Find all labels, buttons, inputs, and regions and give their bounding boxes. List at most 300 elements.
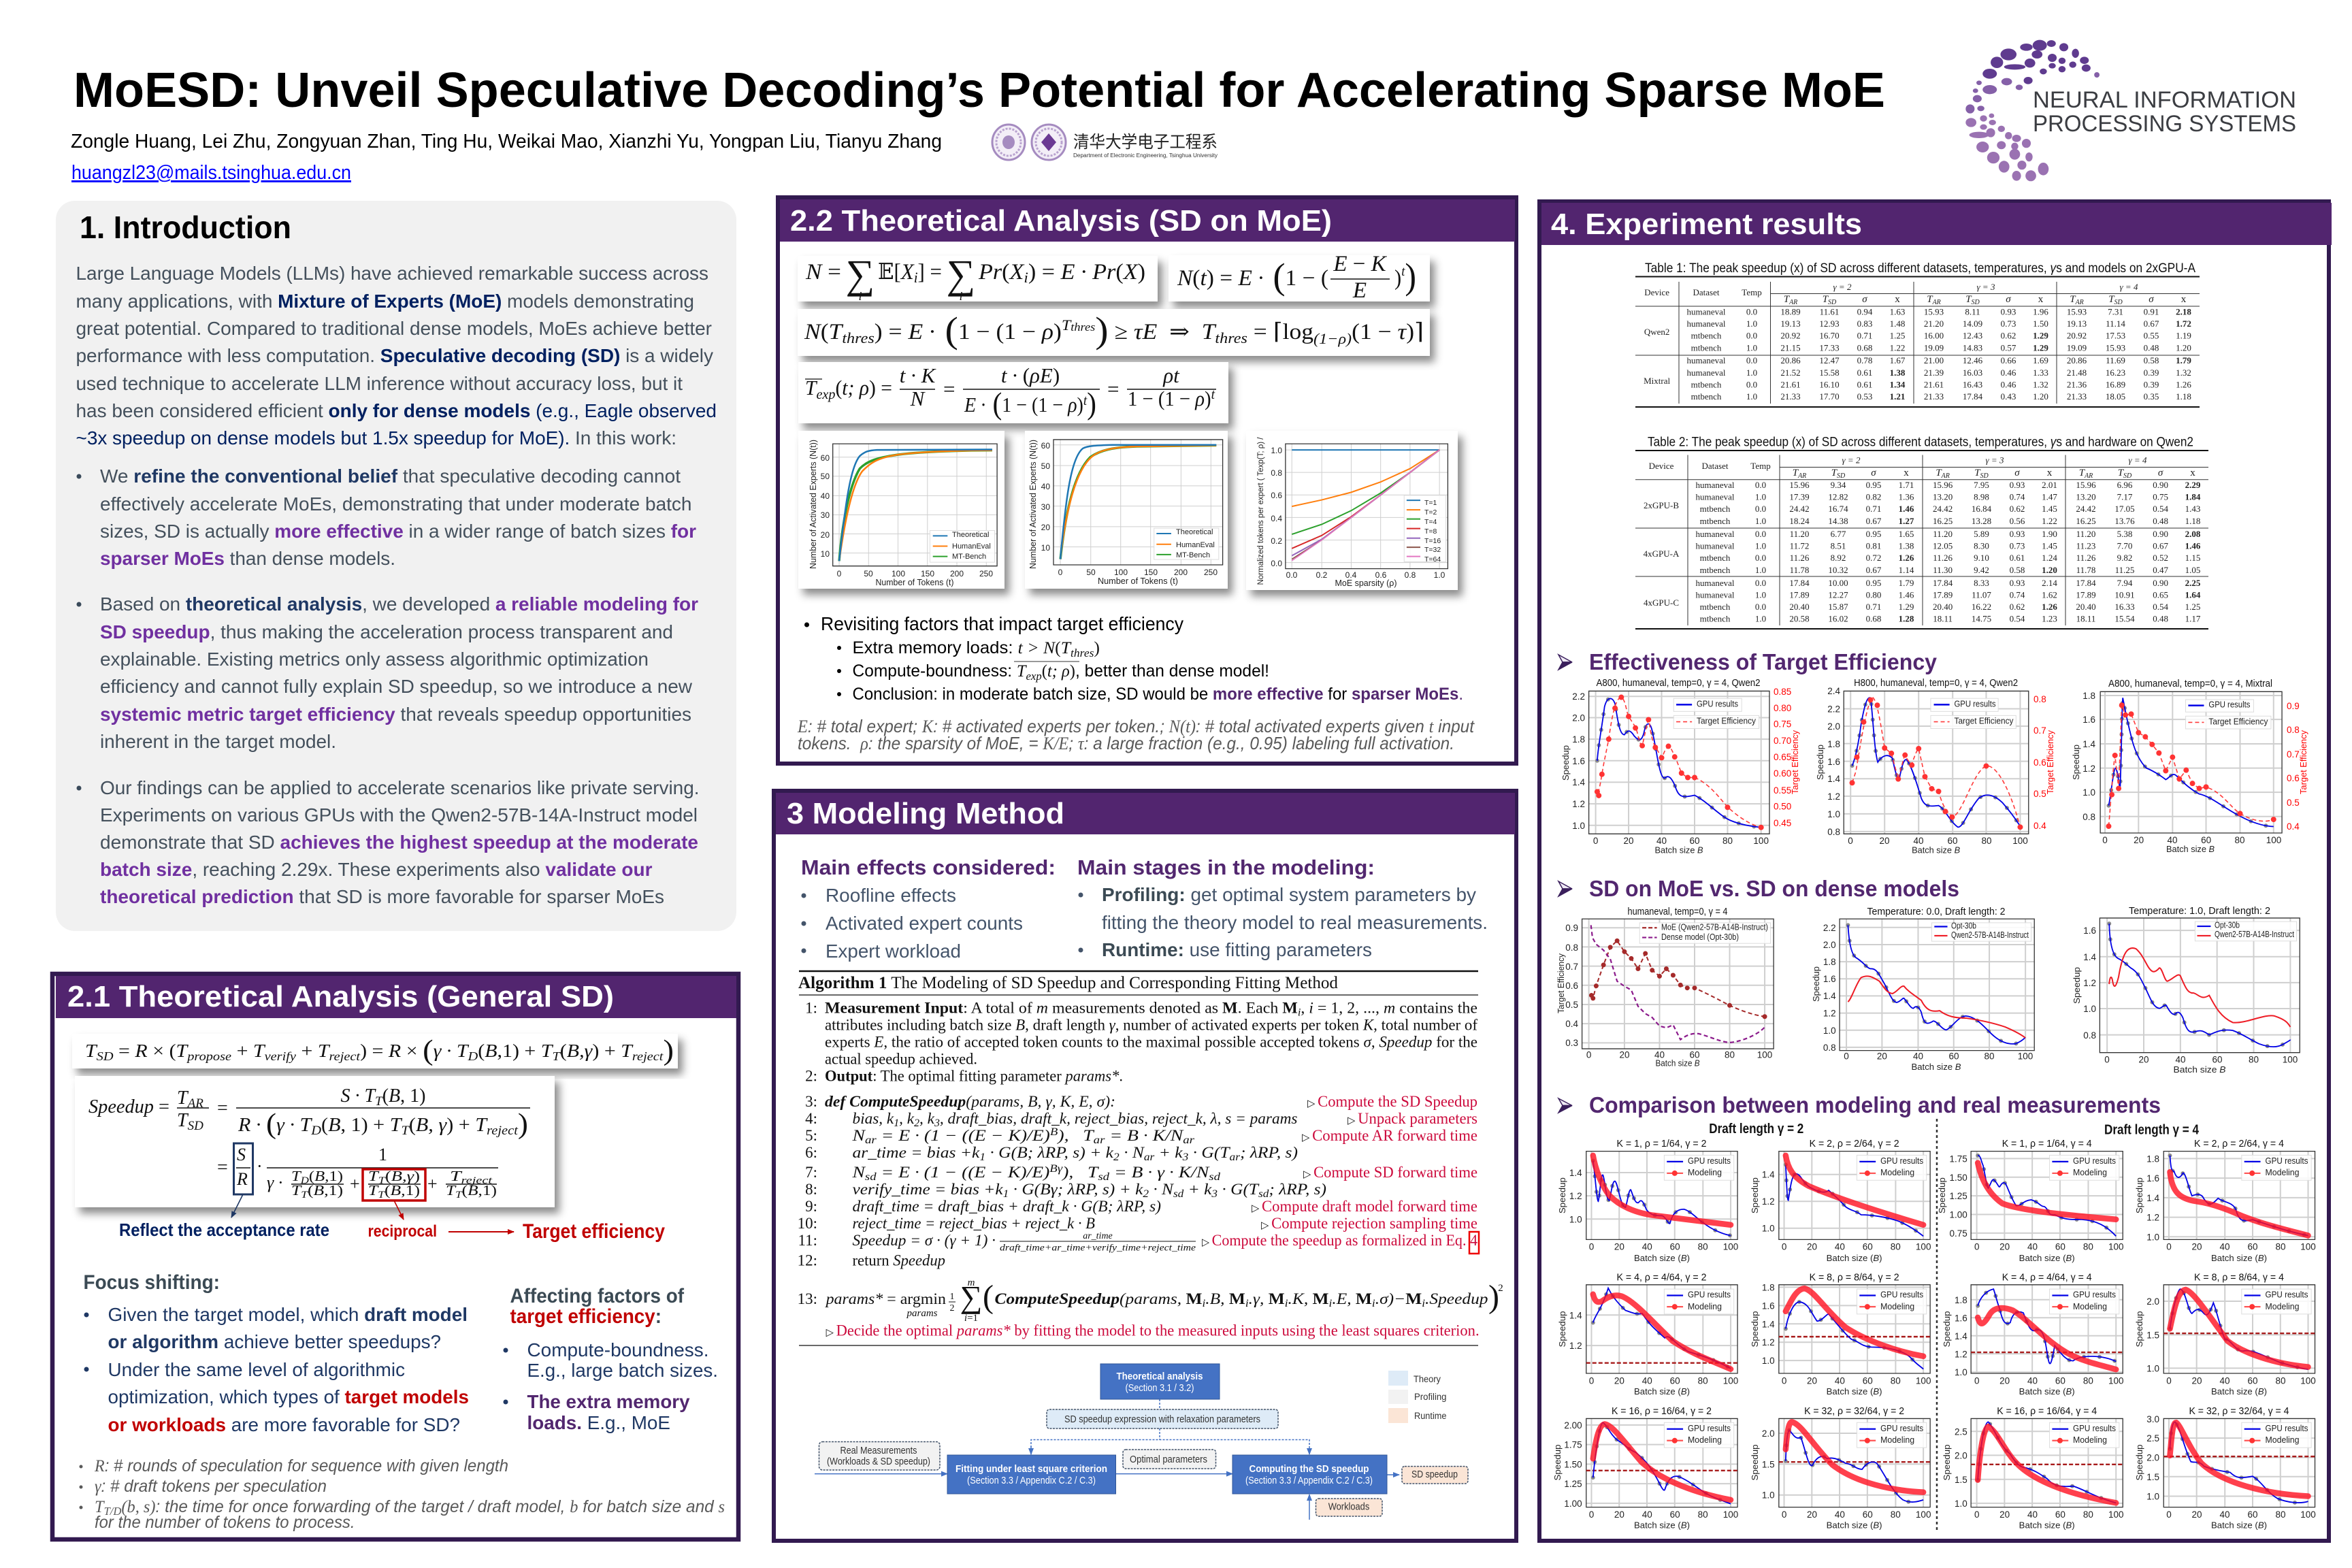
table 1: Qwen2 (1644, 327, 1669, 337)
table 2: 0.95 (1866, 480, 1881, 490)
table 1: 16.03 (1963, 368, 1982, 378)
chart: target efficiency A800 Qwen2: Target Efficiency (1697, 716, 1756, 726)
chart: K=1 gamma=2: Modeling (1688, 1167, 1722, 1177)
footnotes: notation: γ: # draft tokens per speculation (95, 1477, 327, 1496)
chart: activated experts 2: 200 (1174, 568, 1188, 577)
chart: target efficiency A800 Qwen2: Batch size B (1655, 845, 1703, 855)
chart: K=1 gamma=4: 1.50 (1950, 1173, 1967, 1183)
table 2: 13.20 (2076, 491, 2096, 502)
chart: target efficiency MoE vs dense: 0 (1586, 1049, 1591, 1060)
table 1: 17.84 (1963, 391, 1983, 402)
chart: K=1 gamma=2: 1.4 (1569, 1168, 1582, 1178)
algorithm: modeling of SD speedup: M (1405, 1290, 1422, 1307)
algorithm: modeling of SD speedup: N (852, 1127, 863, 1144)
table 1: Mixtral (1644, 376, 1670, 386)
formula: expected activated experts: ∑ (947, 252, 975, 297)
chart: speedup temperature 1: Speedup (2072, 967, 2082, 1004)
chart: target efficiency A800 Qwen2: 0.45 (1774, 818, 1791, 828)
table 2: 1.27 (1899, 516, 1914, 526)
formula: T_thres: τE ⇒ T (1134, 320, 1214, 344)
table 1: 0.91 (2144, 307, 2159, 317)
formula: speedup: T (375, 1094, 383, 1109)
chart: K=16 gamma=2: 40 (1642, 1509, 1652, 1520)
chart: normalized tokens per expert: 0.4 (1345, 570, 1357, 580)
table 1: 1.96 (2033, 307, 2048, 317)
chart: target efficiency H800 Qwen2: GPU results (1955, 698, 1996, 708)
table 2: 1.62 (2042, 589, 2057, 600)
chart: K=1 gamma=2 (1557, 1139, 1738, 1263)
formula: T_SD: T (85, 1041, 95, 1061)
text block: revisiting factors (804, 613, 1463, 704)
chart: target efficiency A800 Qwen2: 80 (1722, 836, 1733, 846)
chart: K=1 gamma=4: 100 (2108, 1242, 2124, 1252)
table 1: 1.0 (1746, 368, 1757, 378)
table 1: humaneval (1686, 307, 1726, 317)
algorithm: modeling of SD speedup: ▷ Compute the SD Speedup (1307, 1093, 1477, 1110)
chart: target efficiency A800 Mixtral: 80 (2234, 835, 2245, 845)
panel: 3 modeling method (774, 791, 1516, 1541)
algorithm: modeling of SD speedup: 1 (1003, 1188, 1009, 1200)
chart: K=2 gamma=2: 80 (1891, 1242, 1901, 1252)
table 2: 7.94 (2117, 578, 2133, 588)
formula: speedup: T (301, 1190, 308, 1200)
formula: T_exp: t; ρ) = (842, 376, 894, 399)
chart: speedup temperature 1: Temperature: 1.0, Draft length: 2 (2129, 906, 2270, 917)
chart: K=1 gamma=2: K = 1, ρ = 1/64, γ = 2 (1617, 1139, 1707, 1149)
algorithm: modeling of SD speedup: · N (1120, 1144, 1145, 1161)
box: SD speedup expression (1047, 1409, 1278, 1428)
table 1: 0.39 (2144, 368, 2159, 378)
formula: expected activated experts: Pr(X (979, 260, 1024, 284)
table 2: 0.48 (2153, 516, 2168, 526)
formula: speedup: ) (518, 1109, 528, 1140)
formula: T_exp: E · (964, 393, 987, 416)
table 1: 16.10 (1819, 380, 1840, 390)
formula: T_SD: ) = (360, 1041, 389, 1061)
chart: target efficiency MoE vs dense (1556, 906, 1774, 1068)
chart: speedup temperature 1: 0.8 (2083, 1030, 2096, 1041)
box: real measurements (819, 1441, 940, 1470)
table 2: 10.32 (1828, 565, 1848, 575)
formula: speedup: R · (238, 1115, 259, 1136)
algorithm: modeling of SD speedup: ar (1094, 1134, 1106, 1146)
algorithm: modeling of SD speedup: 7: (805, 1164, 817, 1181)
table 2: 0.56 (2010, 516, 2025, 526)
algorithm: modeling of SD speedup: 3 (934, 1117, 940, 1129)
text block: revisiting factors: ( (1042, 662, 1047, 681)
formula: speedup: 1 (378, 1145, 387, 1164)
table 2: 0.93 (2010, 578, 2025, 588)
algorithm: modeling of SD speedup: ar (1230, 1152, 1241, 1163)
label: reflect the acceptance rate: Reflect the acceptance rate (119, 1220, 329, 1240)
table 2: 0.58 (2010, 565, 2025, 575)
formula: T_thres: 1 − (1 − (958, 320, 1042, 344)
chart: target efficiency A800 Mixtral: 0.8 (2082, 812, 2095, 822)
text block: introduction paragraph: great potential. Compared to traditional dense models, MoEs achieve better (76, 318, 712, 339)
algorithm: modeling of SD speedup: i (1285, 1298, 1288, 1309)
table 1: γ = 4 (2120, 282, 2138, 292)
formula: T_SD (72, 1034, 678, 1068)
chart: K=16 gamma=4: GPU results (2073, 1423, 2116, 1433)
table 1: 7.31 (2108, 307, 2123, 317)
contact email: huangzl23@mails.tsinghua.edu.cn (71, 162, 351, 184)
chart: K=16 gamma=2: 0 (1589, 1509, 1594, 1520)
algorithm: modeling of SD speedup: + k (1183, 1181, 1212, 1198)
algorithm: modeling of SD speedup: def ComputeSpeedup (params, B, γ, K, E, σ): (825, 1093, 1115, 1110)
chart: target efficiency A800 Mixtral: 1.2 (2082, 764, 2095, 774)
table 2: 1.23 (2042, 613, 2057, 623)
table 2: 16.25 (2076, 516, 2096, 526)
chart: K=1 gamma=4: 0 (1974, 1242, 1979, 1252)
text block: main stages: Main stages in the modeling: (1077, 855, 1375, 879)
heading: 2.2: 2.2 Theoretical Analysis (SD on MoE) (790, 204, 1332, 238)
chart: K=16 gamma=4: 2.5 (1955, 1426, 1967, 1437)
table 1: mtbench (1691, 342, 1722, 353)
box: real measurements: Real Measurements (840, 1446, 917, 1456)
text block: main effects (801, 855, 1056, 962)
table 2: 0.62 (2010, 602, 2025, 612)
table 2: 16.74 (1828, 504, 1848, 514)
table 1: Table 1: The peak speedup (x) of SD across different datasets, temperatures, γs and models on 2xGPU-A (1645, 261, 2195, 276)
chart: K=1 gamma=4: 1.00 (1950, 1210, 1967, 1220)
table 2: 16.25 (1933, 516, 1953, 526)
formula: N(t): N(t) = E · (1177, 266, 1263, 291)
formula: speedup: S · T (341, 1085, 375, 1107)
heading: 3: 3 Modeling Method (787, 797, 1064, 830)
formula: speedup: + (350, 1174, 360, 1194)
bullet: reliable modeling (76, 593, 698, 752)
table 2: 7.17 (2117, 491, 2133, 502)
algorithm: modeling of SD speedup: 5: (805, 1127, 817, 1144)
arrow: reciprocal (394, 1200, 404, 1220)
footnotes: notation: : the time for once forwarding of the target / draft model, b for batch size and s (156, 1497, 725, 1516)
formula: speedup: ( (308, 1182, 314, 1198)
chart: K=16 gamma=4: 40 (2027, 1509, 2038, 1520)
formula: speedup: · (257, 1156, 263, 1176)
chart: target efficiency A800 Mixtral: Batch size B (2166, 844, 2215, 854)
chart: target efficiency MoE vs dense: 40 (1654, 1049, 1665, 1060)
chart: target efficiency A800 Qwen2: 1.6 (1572, 756, 1585, 766)
text block: main stages: Profiling: get optimal system parameters by (1102, 884, 1476, 905)
table 1: mtbench (1691, 380, 1722, 390)
table 2: 1.26 (2042, 602, 2057, 612)
table 2: 1.46 (2185, 540, 2201, 551)
chart: normalized tokens per expert: 0.2 (1271, 536, 1282, 546)
chart: K=8 gamma=2: GPU results (1880, 1290, 1924, 1300)
table 2: T (1936, 468, 1950, 480)
text block: focus shifting: or workloads are more favorable for SD? (108, 1414, 460, 1435)
table 2: 20.58 (1789, 613, 1810, 623)
chart: K=1 gamma=4: 80 (2083, 1242, 2093, 1252)
table 2: 1.65 (1899, 529, 1914, 539)
chart: target efficiency A800 Qwen2: Speedup (1561, 745, 1571, 781)
chart: activated experts 2: 50 (1041, 461, 1050, 471)
algorithm: modeling of SD speedup: draft_time = draft_bias + draft_k · G(B; λRP, s) (852, 1198, 1161, 1215)
chart: K=2 gamma=4: 1.2 (2146, 1213, 2159, 1223)
box: computing the SD speedup: Computing the SD speedup (1250, 1464, 1369, 1475)
chart: K=2 gamma=4 (2134, 1139, 2316, 1263)
chart: K=4 gamma=2: Batch size (B) (1634, 1386, 1690, 1396)
chart: K=32 gamma=4: 40 (2219, 1509, 2230, 1520)
table 2: 12.82 (1828, 491, 1848, 502)
chart: K=1 gamma=2: 0 (1589, 1242, 1594, 1252)
formula: speedup: γ · (267, 1173, 282, 1192)
table 2: 1.64 (2185, 589, 2201, 600)
table 2: 0.67 (2153, 540, 2168, 551)
chart: K=16 gamma=2: 1.00 (1564, 1499, 1582, 1509)
table 2: 0.72 (1866, 553, 1881, 563)
legend: flow colours: Runtime (1414, 1411, 1447, 1421)
table 1: 12.47 (1819, 355, 1840, 365)
text block: focus shifting: optimization, which types of target models (108, 1386, 469, 1407)
algorithm: modeling of SD speedup: .B, (1205, 1290, 1229, 1307)
bullet: refine the conventional belief (76, 466, 696, 569)
table 1: 16.43 (1963, 380, 1982, 390)
table 2: T (2079, 468, 2093, 480)
table 2: 17.84 (2076, 578, 2096, 588)
chart: activated experts 1: 250 (979, 569, 993, 578)
chart: K=4 gamma=4: 20 (1999, 1375, 2010, 1386)
table 2: 0.48 (2153, 613, 2168, 623)
chart: K=4 gamma=4: 0 (1974, 1375, 1979, 1386)
chart: K=8 gamma=4: 0 (2166, 1375, 2172, 1386)
chart: K=2 gamma=2: K = 2, ρ = 2/64, γ = 2 (1810, 1139, 1899, 1149)
chart: K=1 gamma=4: 20 (1999, 1242, 2010, 1252)
chart: speedup temperature 1: 1.0 (2083, 1004, 2096, 1014)
algorithm: modeling of SD speedup: ▷ Unpack parameters (1348, 1110, 1477, 1127)
bullet: findings: theoretical prediction that SD is more favorable for sparser MoEs (100, 886, 664, 907)
formula: T_exp: t · (ρE) (1001, 363, 1060, 387)
chart: K=16 gamma=2: 1.25 (1564, 1479, 1582, 1489)
chart: target efficiency H800 Qwen2: 40 (1913, 836, 1924, 846)
table 2: Dataset (1702, 461, 1729, 471)
chart: K=8 gamma=2: 1.6 (1762, 1301, 1775, 1311)
table 2: 9.42 (1974, 565, 1989, 575)
chart: target efficiency A800 Mixtral: GPU results (2208, 700, 2251, 710)
chart: target efficiency MoE vs dense: 20 (1619, 1049, 1630, 1060)
chart: K=2 gamma=4: Speedup (2134, 1177, 2144, 1213)
chart: activated experts 1: 50 (864, 569, 873, 578)
table 2: AR (1941, 472, 1950, 480)
formula: speedup: B, γ) + T (416, 1115, 486, 1136)
table 2: 0.54 (2010, 613, 2025, 623)
formula: T_exp: t (1211, 386, 1215, 402)
algorithm: modeling of SD speedup: Algorithm 1 The Modeling of SD Speedup and Corresponding Fitting Method (798, 974, 1338, 992)
table 2: SD (2123, 472, 2132, 480)
table 1: 17.33 (1819, 342, 1840, 353)
chart: K=32 gamma=4: GPU results (2265, 1423, 2308, 1433)
text block: affecting factors (504, 1285, 718, 1433)
chart: K=4 gamma=2: Modeling (1688, 1301, 1722, 1311)
table 2: 1.45 (2042, 504, 2057, 514)
table 2: 11.26 (1790, 553, 1810, 563)
table 2: 11.72 (1790, 540, 1809, 551)
table 1: 0.35 (2144, 391, 2159, 402)
chart: speedup temperature 0: 0.8 (1823, 1043, 1836, 1053)
chart: K=8 gamma=2: K = 8, ρ = 8/64, γ = 2 (1810, 1273, 1899, 1284)
table 2: 9.34 (1831, 480, 1846, 490)
chart: K=8 gamma=2: 60 (1863, 1375, 1873, 1386)
table 2: 2.29 (2185, 480, 2201, 490)
table 1: 1.29 (2033, 342, 2048, 353)
heading: 4: 4. Experiment results (1551, 208, 1862, 241)
chart: target efficiency H800 Qwen2: Target Efficiency (2045, 730, 2055, 794)
algorithm: modeling of SD speedup: 13: (798, 1290, 817, 1307)
table 2: 0.62 (2010, 504, 2025, 514)
chart: target efficiency H800 Qwen2: 0.6 (2034, 757, 2046, 768)
chart: target efficiency H800 Qwen2: Target Efficiency (1955, 716, 2014, 726)
text block: revisiting factors: Conclusion: in moderate batch size, SD would be more effective for sparser MoEs. (852, 685, 1463, 704)
chart: activated experts 2: Number of Tokens (t) (1098, 576, 1178, 586)
table 2: 16.02 (1828, 613, 1848, 623)
table 1: 1.22 (1890, 342, 1905, 353)
table 2: 0.68 (1866, 613, 1881, 623)
table 1: 15.93 (1924, 307, 1944, 317)
formula: T_SD: = (114, 1041, 135, 1061)
chart: K=16 gamma=2: 2.00 (1564, 1420, 1582, 1431)
chart: activated experts 1: Theoretical (952, 531, 989, 539)
table 1: 11.61 (1820, 307, 1839, 317)
footnote: notation (797, 716, 1475, 753)
formula: expected activated experts: 𝔼[X (878, 260, 915, 284)
formula: T_thres: ≥ (1109, 320, 1134, 344)
chart: speedup temperature 0: 1.8 (1823, 957, 1836, 967)
table 1 (1635, 261, 2200, 407)
chart: activated experts 2: Number of Activated Experts (N(t)) (1028, 440, 1038, 569)
table 2: 15.87 (1828, 602, 1848, 612)
chart: speedup temperature 0: Speedup (1811, 966, 1821, 1002)
table 2: 17.39 (1789, 491, 1810, 502)
chart: target efficiency A800 Mixtral: 40 (2167, 835, 2178, 845)
chart: target efficiency H800 Qwen2: 0.4 (2034, 821, 2046, 831)
text block: revisiting factors: t; ρ), better than dense model! (1047, 662, 1273, 681)
box: theoretical analysis: Theoretical analysis (1116, 1371, 1203, 1382)
formula: T_thres: ( (935, 310, 958, 350)
bullet: findings: Our findings can be applied to accelerate scenarios like private serving. (100, 777, 700, 798)
chart: target efficiency H800 Qwen2: 60 (1947, 836, 1958, 846)
algorithm: modeling of SD speedup: 3 (1211, 1188, 1218, 1200)
chart: K=8 gamma=4: GPU results (2265, 1290, 2308, 1300)
formula: expected activated experts: i (1024, 269, 1028, 286)
table 2: 0.82 (1866, 491, 1881, 502)
chart: target efficiency A800 Qwen2: 2.2 (1572, 691, 1585, 702)
table 1: 0.39 (2144, 380, 2159, 390)
table 2: 1.71 (1899, 480, 1914, 490)
chart: target efficiency H800 Qwen2: 2.4 (1827, 686, 1840, 696)
formula: T_exp (798, 362, 1228, 423)
table 2: 0.93 (2010, 480, 2025, 490)
footnotes: notation (79, 1456, 725, 1532)
chart: K=1 gamma=2: GPU results (1688, 1156, 1731, 1166)
chart: speedup temperature 0: 1.2 (1823, 1009, 1836, 1018)
table 2: 11.20 (2076, 529, 2095, 539)
chart: target efficiency A800 Mixtral: Speedup (2071, 745, 2081, 780)
table 1: 16.00 (1924, 331, 1944, 341)
chart: activated experts 2: 20 (1041, 523, 1050, 532)
table 2: 0.0 (1755, 553, 1766, 563)
formula: T_exp: N (910, 387, 926, 410)
formula: speedup: Speedup = (88, 1096, 169, 1117)
formula: expected activated experts: ] = (918, 260, 942, 284)
table 1: 1.29 (2033, 331, 2048, 341)
chart: K=2 gamma=2: GPU results (1880, 1156, 1924, 1166)
algorithm: modeling of SD speedup: 6: (805, 1144, 817, 1161)
table 1: 0.67 (2144, 318, 2159, 329)
table 2: 0.73 (2010, 540, 2025, 551)
chart: K=2 gamma=2: 20 (1807, 1242, 1817, 1252)
chart: K=8 gamma=2: 1.0 (1762, 1356, 1775, 1366)
chart: normalized tokens per expert (1246, 431, 1458, 590)
chart: target efficiency MoE vs dense: humaneval, temp=0, γ = 4 (1628, 906, 1727, 917)
formula: expected activated experts: ) = (1028, 260, 1061, 284)
table 2: 1.28 (1899, 613, 1914, 623)
chart: speedup temperature 0: 0 (1844, 1051, 1849, 1062)
table 1: 0.53 (1857, 391, 1872, 402)
chart: K=32 gamma=2: 100 (1916, 1509, 1931, 1520)
table 2: T (1831, 468, 1846, 480)
formula: speedup: B,1) (314, 1168, 340, 1184)
table 2: 2.08 (2185, 529, 2201, 539)
table 2: 1.14 (1899, 565, 1914, 575)
chart: normalized tokens per expert: T=4 (1424, 518, 1437, 526)
table 1: 21.15 (1780, 342, 1801, 353)
table 2: 11.26 (2076, 553, 2096, 563)
chart: K=4 gamma=2: 40 (1642, 1375, 1652, 1386)
table 1: 1.48 (1890, 318, 1905, 329)
algorithm: modeling of SD speedup: = B · γ · K/N (1109, 1164, 1210, 1181)
footnotes: notation: R: # rounds of speculation for sequence with given length (94, 1456, 508, 1475)
algorithm: modeling of SD speedup: draft_time+ar_time+verify_time+reject_time (1000, 1243, 1196, 1254)
chart: normalized tokens per expert: T=32 (1424, 546, 1441, 554)
chart: K=4 gamma=2: 1.2 (1569, 1341, 1582, 1351)
table 2: mtbench (1700, 602, 1731, 612)
chart: K=2 gamma=2: 40 (1835, 1242, 1845, 1252)
chart: target efficiency A800 Qwen2: Target Efficiency (1790, 730, 1800, 794)
chart: K=32 gamma=4: 3.0 (2146, 1414, 2159, 1424)
formula: T_SD: T (552, 1049, 561, 1063)
formula: speedup: T (455, 1190, 463, 1200)
table 2: 20.40 (1933, 602, 1953, 612)
chart: target efficiency A800 Qwen2: 0.55 (1774, 785, 1791, 796)
formula: speedup: T (450, 1168, 458, 1184)
table 1: 1.26 (2176, 380, 2191, 390)
chart: K=4 gamma=2 (1557, 1273, 1738, 1396)
chart: speedup temperature 0 (1811, 906, 2034, 1072)
algorithm: modeling of SD speedup: = B · K/N (1105, 1127, 1184, 1144)
chart: K=16 gamma=2: 60 (1670, 1509, 1680, 1520)
box: workloads (1316, 1499, 1382, 1516)
formula: T_SD: + (231, 1041, 253, 1061)
chart: target efficiency H800 Qwen2: 1.8 (1827, 739, 1840, 749)
table 2: 16.33 (2114, 602, 2135, 612)
table 2: 11.30 (1933, 565, 1953, 575)
algorithm: modeling of SD speedup: sd (1209, 1171, 1220, 1183)
table 2: x (1904, 468, 1909, 478)
table 2: Device (1649, 461, 1674, 471)
table 1: T (1784, 294, 1797, 306)
chart: K=4 gamma=4: K = 4, ρ = 4/64, γ = 4 (2002, 1273, 2092, 1284)
formula: T_SD: ) (663, 1035, 674, 1066)
chart: target efficiency A800 Qwen2: 60 (1689, 836, 1700, 846)
table 2: humaneval (1695, 540, 1735, 551)
algorithm: modeling of SD speedup: 9: (805, 1198, 817, 1215)
chart: K=16 gamma=2: Modeling (1688, 1435, 1722, 1445)
chart: speedup temperature 1: 1.2 (2083, 978, 2096, 988)
formula: T_SD: reject (632, 1049, 664, 1063)
chart: speedup temperature 0: 60 (1948, 1051, 1959, 1062)
table 2: AR (1797, 472, 1806, 480)
chart: K=2 gamma=4: 1.8 (2146, 1154, 2159, 1164)
